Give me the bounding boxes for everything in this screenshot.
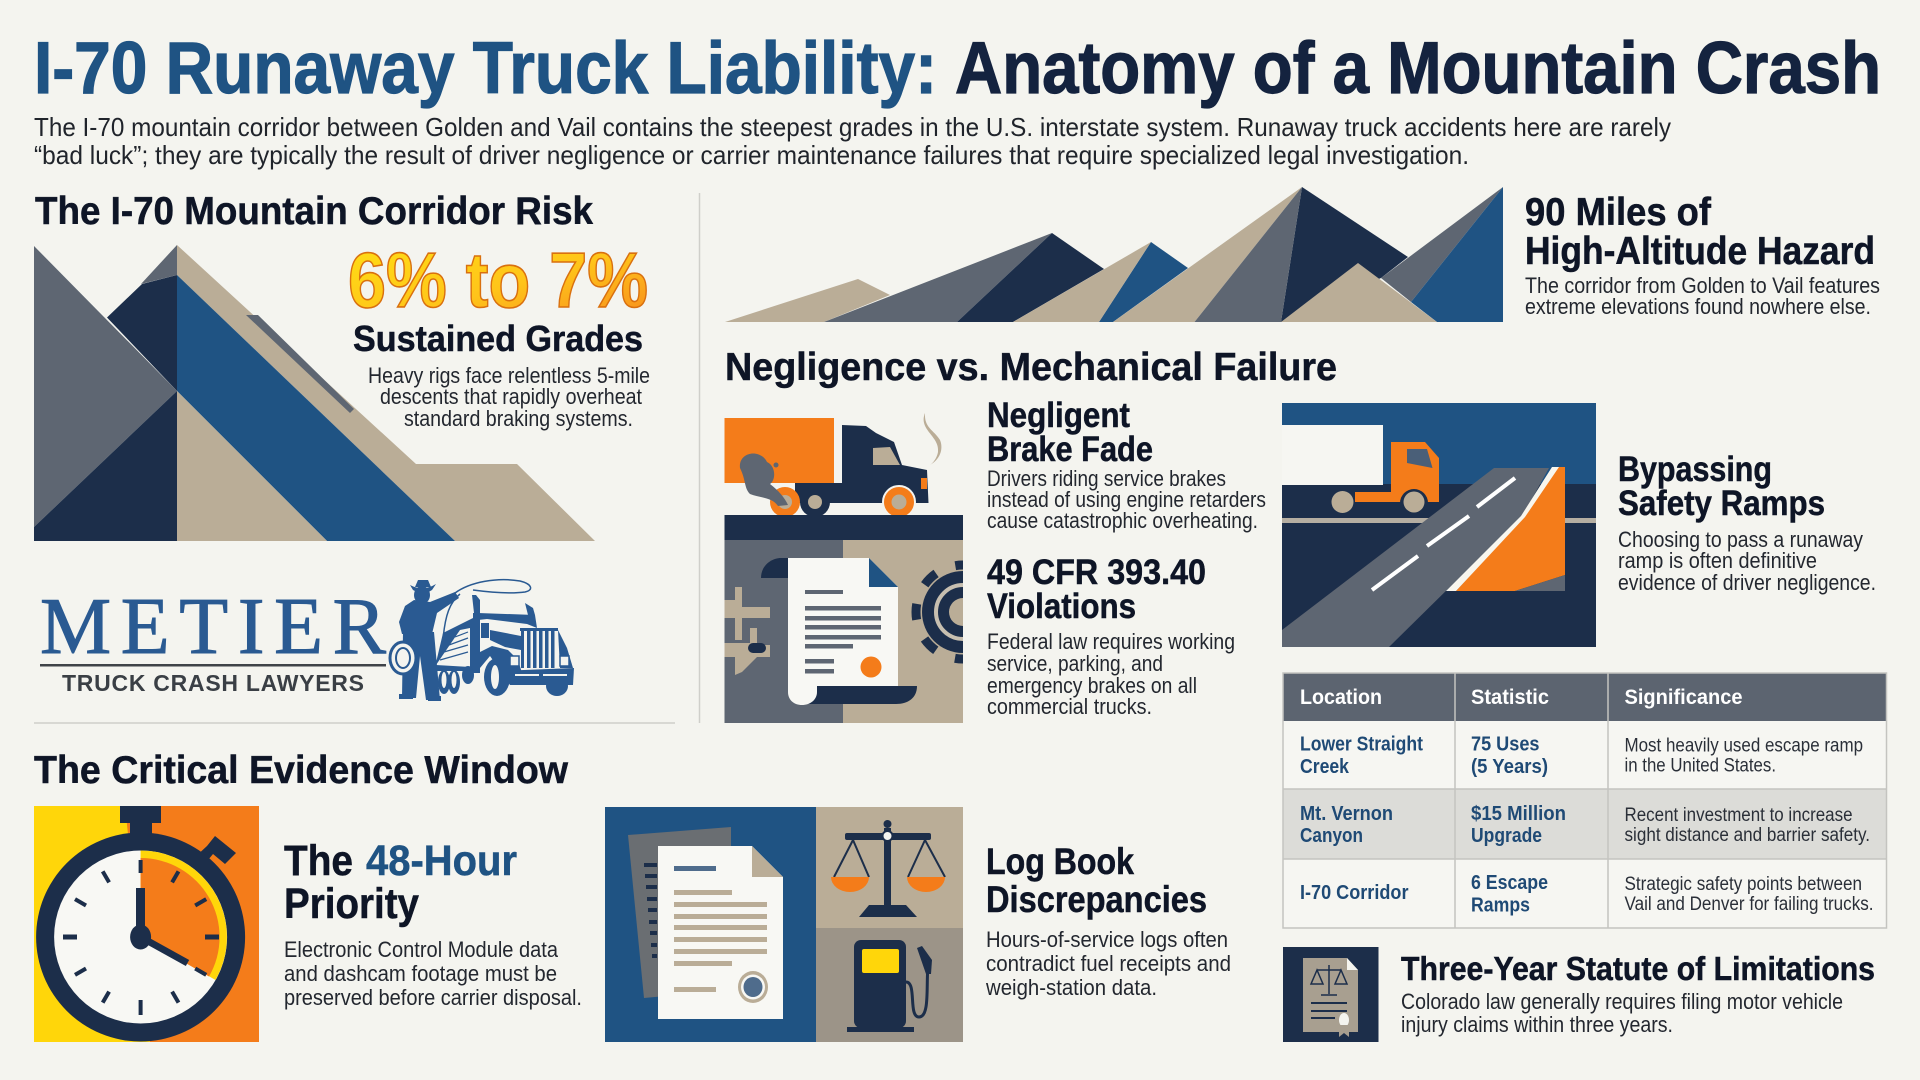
title: [34, 28, 1881, 109]
text: 90 miles of hazard: High-Altitude Hazard: [1525, 230, 1875, 273]
text: 49 CFR violations: emergency brakes on all: [987, 673, 1197, 698]
text: three-year statute: Three-Year Statute of Limitations: [1401, 950, 1875, 987]
table: escape ramp statistics: [1283, 673, 1886, 928]
text: three-year statute: injury claims within three years.: [1401, 1012, 1673, 1037]
text: log book discrepancies: Discrepancies: [986, 879, 1207, 920]
text: bypassing safety ramps: ramp is often definitive: [1618, 548, 1817, 573]
icon: statute document: [1283, 947, 1378, 1042]
heading: critical evidence window: The Critical Evidence Window: [34, 749, 569, 792]
icon: truck: [433, 595, 574, 696]
text: sustained grades: descents that rapidly overheat: [380, 384, 642, 409]
text: bypassing safety ramps: evidence of driver negligence.: [1618, 570, 1876, 595]
text: 48-hour priority: Electronic Control Module data: [284, 937, 559, 962]
text: negligent brake fade: Brake Fade: [987, 430, 1153, 469]
icon: gear: [912, 560, 963, 664]
text: 90 miles of hazard: 90 Miles of: [1525, 191, 1712, 234]
text: log book discrepancies: weigh-station data.: [985, 975, 1157, 1000]
illustration: mountain range: [725, 187, 1503, 322]
text: bypassing safety ramps: Safety Ramps: [1618, 484, 1825, 523]
text: log book discrepancies: Hours-of-service logs often: [986, 927, 1228, 952]
text: 90 miles of hazard: The corridor from Golden to Vail features: [1525, 273, 1880, 298]
text: bypassing safety ramps: Bypassing: [1618, 450, 1772, 489]
text: 48-hour priority: and dashcam footage must be: [284, 961, 557, 986]
table row: Lower Straight Creek: (5 Years): [1471, 756, 1548, 778]
table header: [1300, 686, 1742, 709]
icon: stopwatch: [34, 806, 259, 1042]
icon: scales of justice: [831, 820, 945, 917]
table row: Mt. Vernon Canyon: Mt. Vernon: [1300, 803, 1393, 825]
text: 49 CFR violations: Violations: [987, 587, 1136, 626]
table row: Mt. Vernon Canyon: [1300, 803, 1870, 847]
table row: Lower Straight Creek: Lower Straight: [1300, 734, 1423, 756]
table header: Significance: [1624, 686, 1742, 709]
icon: log pages: [628, 827, 783, 1019]
table row: Lower Straight Creek: 75 Uses: [1471, 734, 1540, 756]
icon: brake hardware: [724, 587, 770, 675]
icon: cowboy with lasso: [390, 580, 531, 701]
table row: Lower Straight Creek: [1300, 734, 1863, 778]
intro paragraph: “bad luck”; they are typically the result of driver negligence or carrier maintenance failures that require specialized legal investigation.: [34, 140, 1469, 170]
text: negligent brake fade: cause catastrophic overheating.: [987, 508, 1258, 533]
table row: Lower Straight Creek: Most heavily used escape ramp: [1624, 736, 1863, 756]
text: 49 CFR violations: Federal law requires working: [987, 629, 1235, 654]
text: log book discrepancies: [985, 841, 1231, 1000]
text: negligent brake fade: instead of using engine retarders: [987, 487, 1266, 512]
stat: grade percentage: 6% to 7%: [348, 236, 648, 324]
text: 49 CFR violations: service, parking, and: [987, 651, 1163, 676]
text: 90 miles of hazard: [1525, 191, 1880, 319]
illustration: brake fade truck and document: [724, 413, 963, 723]
table header: Statistic: [1471, 686, 1549, 709]
heading: corridor risk: The I-70 Mountain Corridor Risk: [35, 190, 593, 233]
text: 90 miles of hazard: extreme elevations found nowhere else.: [1525, 294, 1871, 319]
illustration: large mountain: [34, 245, 595, 541]
illustration: log book, scales and fuel pump: [605, 807, 963, 1042]
text: sustained grades: Heavy rigs face relentless 5-mile: [368, 363, 650, 388]
text: 49 CFR violations: [987, 553, 1235, 719]
text: bypassing safety ramps: Choosing to pass a runaway: [1618, 527, 1863, 552]
text: sustained grades: [353, 318, 650, 431]
table row: Lower Straight Creek: Creek: [1300, 756, 1350, 778]
text: negligent brake fade: Negligent: [987, 396, 1130, 435]
text: three-year statute: [1401, 950, 1875, 1037]
text: 48-hour priority: preserved before carrier disposal.: [284, 985, 582, 1010]
icon: truck with smoking brakes: [724, 413, 941, 518]
table row: I-70 Corridor: 6 Escape: [1471, 872, 1548, 894]
text: 48-hour priority: Priority: [284, 880, 419, 928]
truck cab: [472, 595, 574, 685]
table header: Location: [1300, 686, 1382, 709]
table row: I-70 Corridor: I-70 Corridor: [1300, 882, 1409, 904]
intro paragraph: The I-70 mountain corridor between Golden and Vail contains the steepest grades in the U.S. interstate system. Runaway truck accidents here are rarely: [34, 112, 1671, 142]
text: log book discrepancies: contradict fuel receipts and: [986, 951, 1231, 976]
table row: I-70 Corridor: Ramps: [1471, 894, 1530, 916]
text: 48-hour priority: [284, 837, 582, 1010]
text: negligent brake fade: [987, 396, 1266, 533]
illustration: bypassed safety ramp: [1282, 403, 1596, 647]
heading: negligence vs mechanical failure: Negligence vs. Mechanical Failure: [725, 346, 1337, 389]
intro paragraph: [34, 112, 1671, 170]
text: 48-hour priority: 48-Hour: [366, 837, 517, 885]
text: 48-hour priority: The: [284, 837, 353, 885]
table row: Mt. Vernon Canyon: sight distance and barrier safety.: [1624, 825, 1870, 846]
text: 49 CFR violations: commercial trucks.: [987, 694, 1152, 719]
table row: I-70 Corridor: Strategic safety points between: [1624, 874, 1862, 895]
table row: I-70 Corridor: Vail and Denver for failing trucks.: [1624, 894, 1874, 915]
text: sustained grades: Sustained Grades: [353, 318, 643, 359]
table row: Mt. Vernon Canyon: Recent investment to increase: [1624, 805, 1852, 826]
table row: Mt. Vernon Canyon: Upgrade: [1471, 825, 1542, 847]
icon: fuel pump: [847, 940, 932, 1032]
text: negligent brake fade: Drivers riding service brakes: [987, 466, 1226, 491]
table row: Mt. Vernon Canyon: $15 Million: [1471, 803, 1566, 825]
text: bypassing safety ramps: [1618, 450, 1876, 595]
logo: Metier Truck Crash Lawyers: [40, 580, 574, 701]
text: three-year statute: Colorado law generally requires filing motor vehicle: [1401, 989, 1843, 1014]
text: log book discrepancies: Log Book: [986, 841, 1134, 882]
table row: I-70 Corridor: [1300, 872, 1874, 916]
text: 49 CFR violations: 49 CFR 393.40: [987, 553, 1206, 592]
logo: Metier Truck Crash Lawyers: TRUCK CRASH LAWYERS: [62, 670, 364, 696]
table row: Mt. Vernon Canyon: Canyon: [1300, 825, 1363, 847]
table row: Lower Straight Creek: in the United States.: [1624, 756, 1776, 776]
logo: Metier Truck Crash Lawyers: METIER: [40, 583, 387, 671]
text: sustained grades: standard braking systems.: [404, 406, 633, 431]
icon: legal scroll: [761, 558, 917, 705]
title: I-70 Runaway Truck Liability:: [34, 28, 937, 109]
